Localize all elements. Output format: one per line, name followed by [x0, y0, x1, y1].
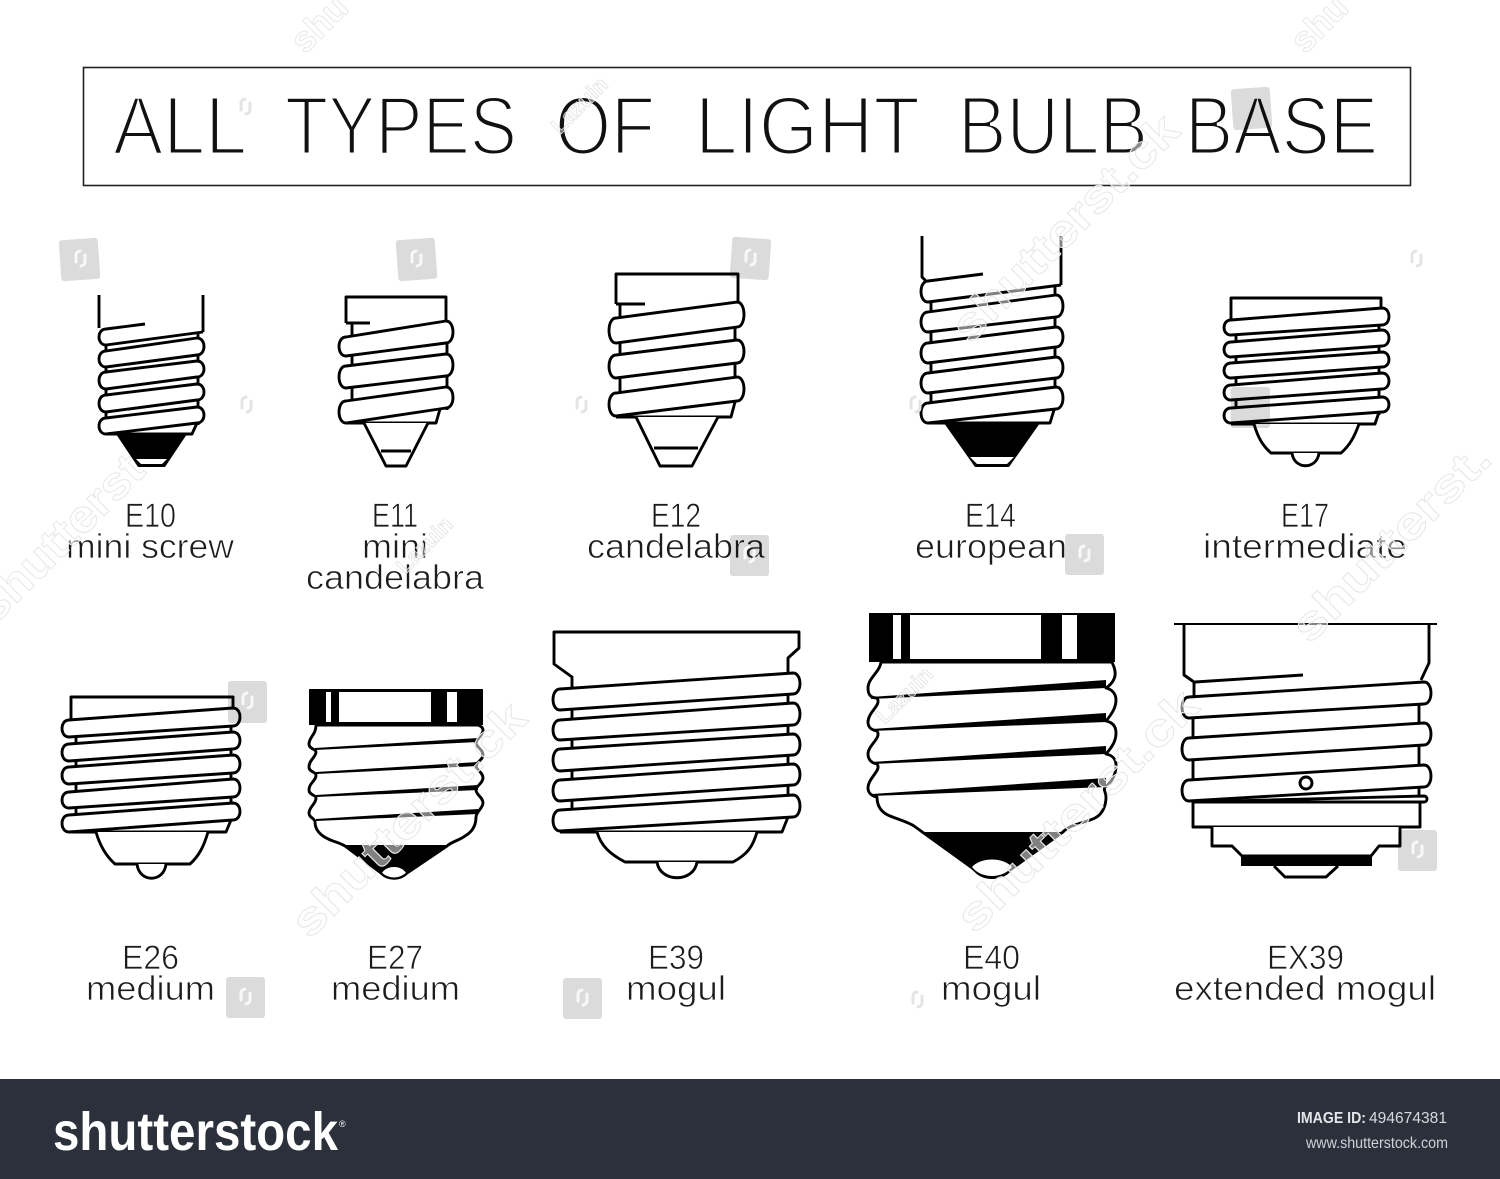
title: BASE [1185, 79, 1378, 172]
label: EX39: EX39 [1267, 939, 1344, 977]
label: EX39: extended mogul [1174, 970, 1436, 1008]
watermark overlay: shutterst.ck [945, 679, 1209, 942]
title: ALL [113, 79, 247, 172]
label: E17 [1203, 497, 1407, 566]
title [84, 68, 1410, 186]
title: OF [555, 79, 655, 172]
watermark overlay: Lazuin [546, 72, 613, 139]
label: E40: E40 [963, 939, 1020, 977]
label: E26 [86, 939, 215, 1008]
icon: E26 base [62, 697, 240, 878]
label: E14 [915, 497, 1067, 566]
icon: E17 base [1224, 298, 1389, 466]
label: E10 [66, 497, 234, 566]
label: E14: european [915, 528, 1067, 566]
watermark overlay: shutterst. [1280, 431, 1500, 652]
label: E11: mini [362, 528, 428, 566]
label: E27 [331, 939, 460, 1008]
label: E26: E26 [122, 939, 179, 977]
icon: EX39 base [1174, 624, 1437, 877]
label: E26: medium [86, 970, 215, 1008]
image id: 494674381 [1369, 1110, 1447, 1127]
icon: E27 base [309, 689, 483, 878]
title: TYPES [285, 79, 517, 172]
label: E12 [587, 497, 765, 566]
icon: E10 base [99, 295, 204, 467]
label: E39 [626, 939, 726, 1008]
image id: www.shutterstock.com [1305, 1135, 1448, 1152]
footer bar [0, 1079, 1500, 1179]
label: E11 [306, 497, 484, 597]
label: E40: mogul [941, 970, 1041, 1008]
icon: E12 base [609, 274, 744, 466]
icon: E11 base [339, 297, 453, 466]
title: LIGHT [695, 79, 920, 172]
label: E12: E12 [651, 497, 701, 535]
watermark overlay: shutterst.ck [940, 103, 1190, 352]
label: E40 [941, 939, 1041, 1008]
icon: E14 base [921, 236, 1063, 467]
label: E12: candelabra [587, 528, 765, 566]
image id: IMAGE ID: [1297, 1110, 1366, 1127]
label: E17: E17 [1281, 497, 1329, 535]
title: BULB [958, 79, 1148, 172]
icon: E39 base [553, 632, 800, 878]
label: E27: medium [331, 970, 460, 1008]
label: E14: E14 [965, 497, 1016, 535]
label: E27: E27 [367, 939, 423, 977]
label: E10: E10 [125, 497, 176, 535]
label: E11: candelabra [306, 559, 484, 597]
watermark overlay: shutterst.ck [280, 691, 537, 947]
brand logo: shutterstock [53, 1102, 339, 1162]
brand logo: ® [339, 1119, 346, 1129]
label: E10: mini screw [66, 528, 234, 566]
label: E39: E39 [648, 939, 704, 977]
label: E17: intermediate [1203, 528, 1407, 566]
label: E39: mogul [626, 970, 726, 1008]
watermark overlay: Lazuin [871, 662, 938, 729]
label: EX39 [1174, 939, 1436, 1008]
image id [1297, 1110, 1448, 1152]
watermark overlay: Lazuin [391, 512, 458, 579]
label: E11: E11 [372, 497, 418, 535]
icon: E40 base [868, 613, 1116, 878]
